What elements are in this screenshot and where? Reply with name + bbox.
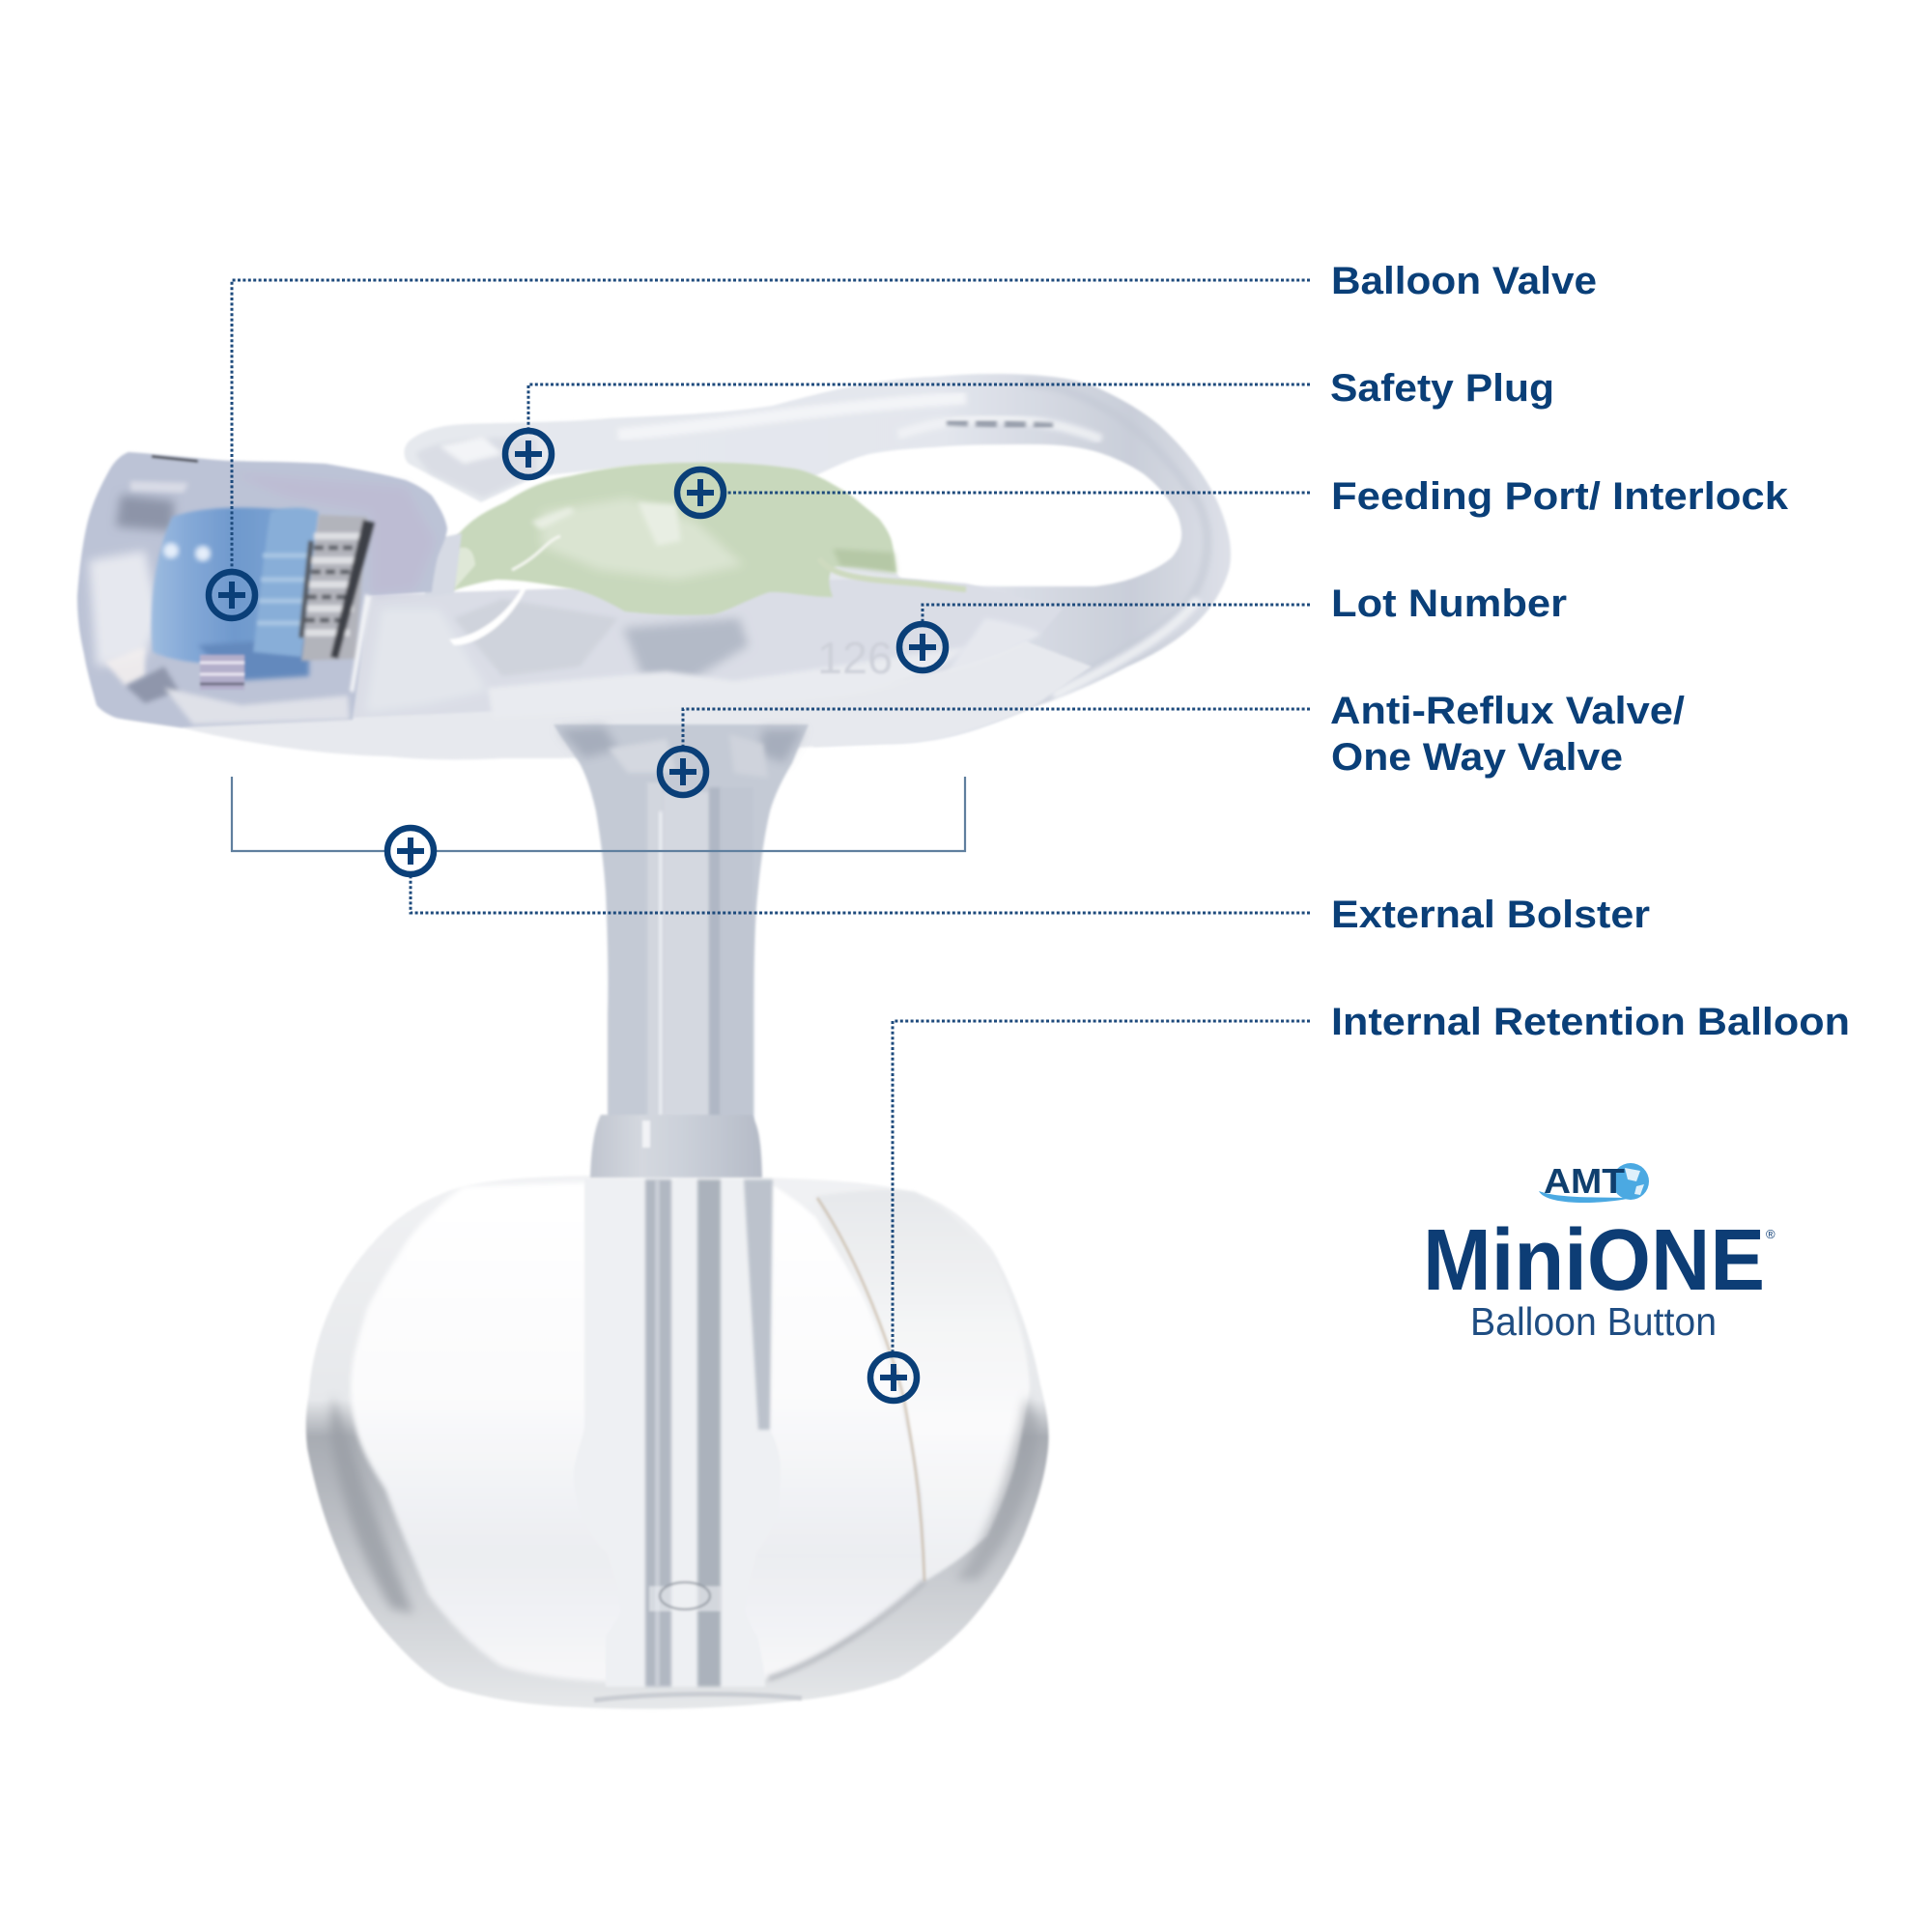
balloon: right bright region bbox=[696, 1179, 924, 1682]
marker: feeding port bbox=[677, 469, 724, 516]
bracket: external bolster span bbox=[232, 777, 965, 851]
callout line: External Bolster bbox=[411, 877, 1310, 913]
logo text: MiniONE: MiniONE bbox=[1423, 1212, 1765, 1309]
logo: AMT MiniONE Balloon Button bbox=[1423, 1161, 1776, 1344]
label: Feeding Port/ Interlock: Feeding Port/ Interlock bbox=[1331, 475, 1789, 518]
marker: retention balloon bbox=[870, 1354, 917, 1401]
logo text: registered mark: ® bbox=[1766, 1227, 1776, 1241]
logo text: AMT: AMT bbox=[1544, 1161, 1625, 1201]
label: Safety Plug: Safety Plug bbox=[1330, 367, 1554, 410]
logo text: Balloon Button: Balloon Button bbox=[1470, 1299, 1717, 1344]
marker: anti-reflux valve bbox=[660, 749, 706, 795]
device: stem with flared top bbox=[554, 724, 809, 1121]
icon: AMT globe bbox=[1539, 1163, 1649, 1203]
balloon: tube collar bbox=[590, 1115, 762, 1178]
device: feeding port green dome bbox=[448, 463, 966, 615]
label: Anti-Reflux Valve / One Way Valve: Anti-Reflux Valve/ bbox=[1330, 690, 1685, 732]
callout line: Internal Retention Balloon bbox=[893, 1021, 1310, 1351]
callout line: Safety Plug bbox=[528, 384, 1310, 428]
balloon: dark lower left shadow bbox=[330, 1396, 413, 1613]
device: internal retention balloon bbox=[306, 1115, 1049, 1709]
device: lower body of the external bolster bbox=[116, 578, 1092, 759]
marker: external bolster bbox=[387, 828, 434, 874]
label: Balloon Valve: Balloon Valve bbox=[1331, 260, 1597, 302]
callout line: Anti-Reflux Valve bbox=[683, 709, 1310, 746]
callout line: Lot Number bbox=[923, 605, 1310, 621]
label: Anti-Reflux Valve / One Way Valve bbox=[1330, 690, 1685, 779]
balloon: inner tube bbox=[574, 1179, 781, 1687]
label: Anti-Reflux Valve / One Way Valve: One Way Valve bbox=[1331, 736, 1623, 779]
device: strap and safety plug loop bbox=[404, 374, 1231, 747]
marker: balloon valve bbox=[209, 572, 255, 618]
marker: safety plug bbox=[505, 431, 552, 477]
device: lower body of the external bolster: 126 bbox=[817, 633, 893, 683]
label: External Bolster: External Bolster bbox=[1331, 894, 1650, 936]
device: purple thread marks bbox=[200, 655, 244, 690]
label: Lot Number: Lot Number bbox=[1331, 582, 1567, 625]
balloon: right side panel bbox=[815, 1190, 1030, 1581]
marker: lot number bbox=[899, 624, 946, 670]
callout line: Balloon Valve bbox=[232, 280, 1310, 570]
device: balloon valve head bbox=[77, 452, 462, 727]
callout line: Feeding Port bbox=[726, 491, 1310, 495]
device: threaded inner mechanism bbox=[301, 515, 375, 693]
label: Internal Retention Balloon: Internal Retention Balloon bbox=[1331, 1001, 1850, 1043]
device: ridged blue ring bbox=[253, 507, 319, 657]
balloon: left bright region bbox=[351, 1179, 676, 1682]
